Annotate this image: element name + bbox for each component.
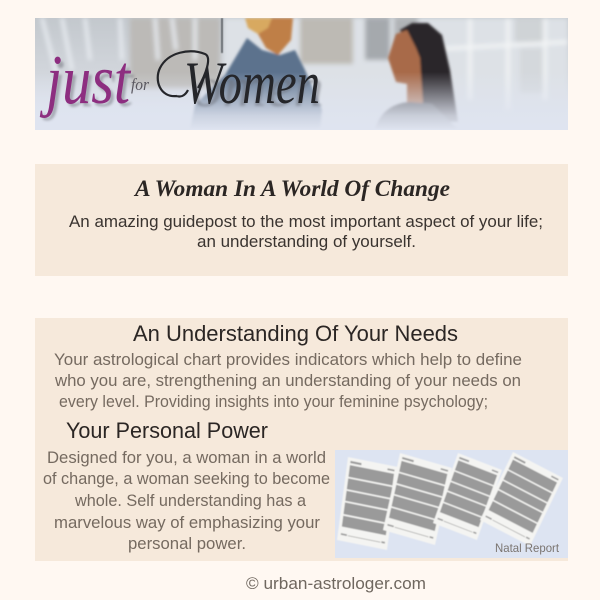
power text: [43, 448, 330, 553]
banner title shadow: just: [42, 45, 135, 121]
power text: personal power.: [128, 534, 246, 553]
banner title: for: [131, 75, 149, 94]
banner title: just: [39, 42, 131, 119]
power text: whole. Self understanding has a: [74, 491, 307, 510]
intro text: An amazing guidepost to the most important aspect of your life;: [69, 212, 543, 231]
banner bottom fade: [130, 74, 566, 130]
banner: just for Women: [35, 18, 568, 130]
report pages: [337, 452, 563, 550]
panel: intro: [35, 164, 568, 276]
banner curtain backdrop: [40, 18, 568, 96]
power text: marvelous way of emphasizing your: [54, 513, 320, 532]
swash of the W: [158, 51, 208, 97]
needs text: [54, 350, 522, 411]
banner title shadow: [42, 60, 322, 122]
intro heading: A Woman In A World Of Change: [133, 176, 450, 201]
banner woman left: [190, 18, 322, 130]
power text: of change, a woman seeking to become: [43, 469, 330, 488]
intro text: [69, 212, 543, 251]
natal report image: [335, 450, 568, 558]
intro text: an understanding of yourself.: [197, 232, 416, 251]
banner title: Women: [184, 50, 320, 116]
heading: needs: An Understanding Of Your Needs: [133, 321, 458, 346]
heading: personal power: Your Personal Power: [66, 418, 268, 443]
needs text: who you are, strengthening an understanding of your needs on: [54, 371, 521, 390]
report caption: Natal Report: [495, 541, 560, 555]
footer credit: © urban-astrologer.com: [246, 574, 426, 593]
power text: Designed for you, a woman in a world: [47, 448, 326, 467]
needs text: every level. Providing insights into your feminine psychology;: [59, 392, 488, 411]
panel: needs and power: [35, 318, 568, 561]
banner title: [40, 50, 318, 118]
needs text: Your astrological chart provides indicators which help to define: [54, 350, 522, 369]
banner title shadow: omen: [192, 57, 324, 119]
banner window frame line: [221, 18, 223, 53]
banner woman right: [375, 23, 458, 130]
